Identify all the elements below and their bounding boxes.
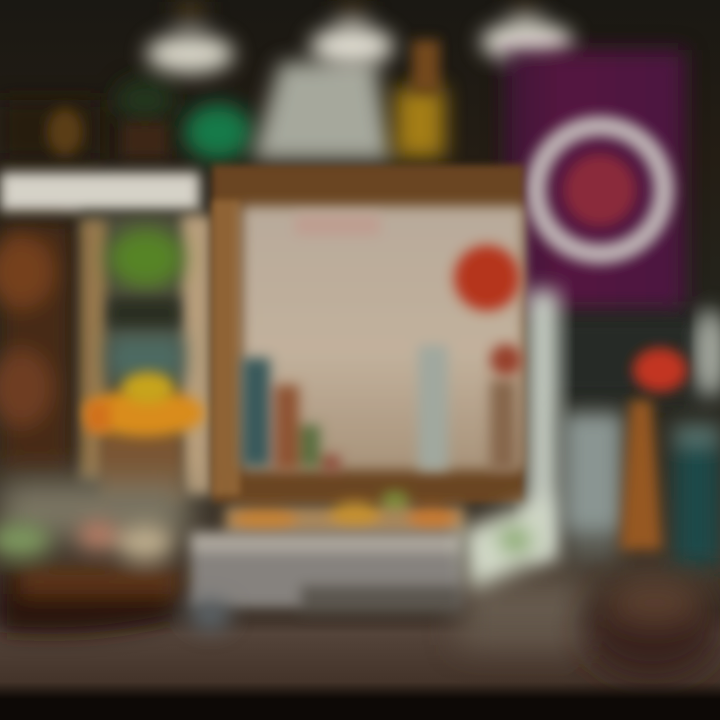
small red mark (322, 455, 340, 471)
right side dark wall and pale strip (527, 290, 720, 560)
hanging lamps (146, 2, 573, 74)
small red circle (490, 344, 522, 376)
red flower (633, 348, 687, 392)
white green card (462, 495, 555, 590)
brown bowl foreground (584, 580, 720, 680)
bowl with salad (0, 521, 232, 634)
faint pink heading (295, 215, 380, 235)
table top (0, 610, 720, 720)
wooden frame (212, 165, 524, 503)
mid table glow (0, 480, 590, 645)
purple poster (505, 50, 685, 312)
chart on canvas (242, 215, 516, 471)
orange stick (620, 400, 662, 550)
poster ring (536, 126, 664, 254)
right brown column (490, 380, 516, 470)
left shelf band (0, 172, 212, 495)
green plant (108, 228, 184, 380)
grey white box (190, 532, 462, 613)
green bar (300, 425, 320, 467)
left wooden board (0, 222, 72, 472)
poster red centre (564, 154, 636, 226)
glass of water (562, 412, 624, 562)
frame base row of fruit (225, 491, 465, 534)
teal bar (242, 358, 270, 466)
bottom shadow (0, 682, 720, 720)
orange bar (275, 385, 299, 470)
teal jar (674, 325, 720, 565)
big red circle (454, 245, 520, 311)
frame canvas (242, 206, 524, 470)
pale blue bar (418, 345, 448, 470)
shelf items: top background (0, 40, 445, 160)
yellow fruit jar (85, 372, 205, 504)
